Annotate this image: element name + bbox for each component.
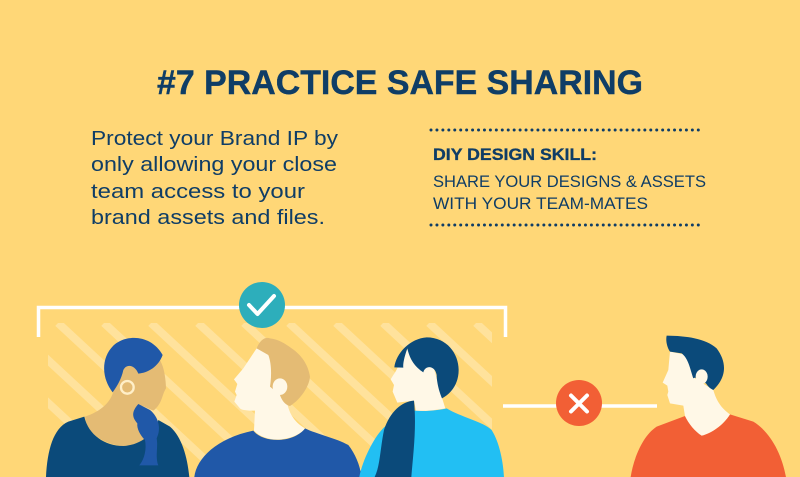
diagonal stripe background [48,323,492,471]
blue hair [104,338,163,392]
braid [133,404,159,465]
blue sweater [194,428,362,477]
dark hair [666,336,724,390]
sweater [359,408,504,477]
ear [273,378,287,395]
face and neck [234,348,305,439]
navy sweater [46,417,189,477]
person 1: woman with braid [46,338,189,477]
blond hair [257,338,310,406]
body text block: team access to your [91,180,305,203]
person 2: blond man [194,338,362,477]
body text block: only allowing your close [91,153,337,176]
DIY design skill callout [431,130,706,225]
title: #7 PRACTICE SAFE SHARING [157,64,643,102]
body text block: Protect your Brand IP by [91,127,339,150]
DIY design skill callout: SHARE YOUR DESIGNS & ASSETS [433,173,706,191]
person 4: excluded man [631,336,786,477]
ear [696,369,708,384]
earring [121,381,134,394]
white bracket [38,308,506,337]
connector line with cross badge [503,380,657,426]
check badge [239,282,285,328]
skin [85,349,166,447]
DIY design skill callout: WITH YOUR TEAM-MATES [433,195,648,213]
body text block [91,127,339,229]
long ponytail [375,401,415,477]
person 3: woman with long dark hair [359,337,504,477]
body text block: brand assets and files. [91,206,325,229]
orange shirt [631,414,786,477]
DIY design skill callout: DIY DESIGN SKILL: [433,146,597,164]
dark hair [394,337,459,398]
face and neck [391,348,445,411]
infographic canvas [36,70,786,477]
face and neck [663,352,730,436]
